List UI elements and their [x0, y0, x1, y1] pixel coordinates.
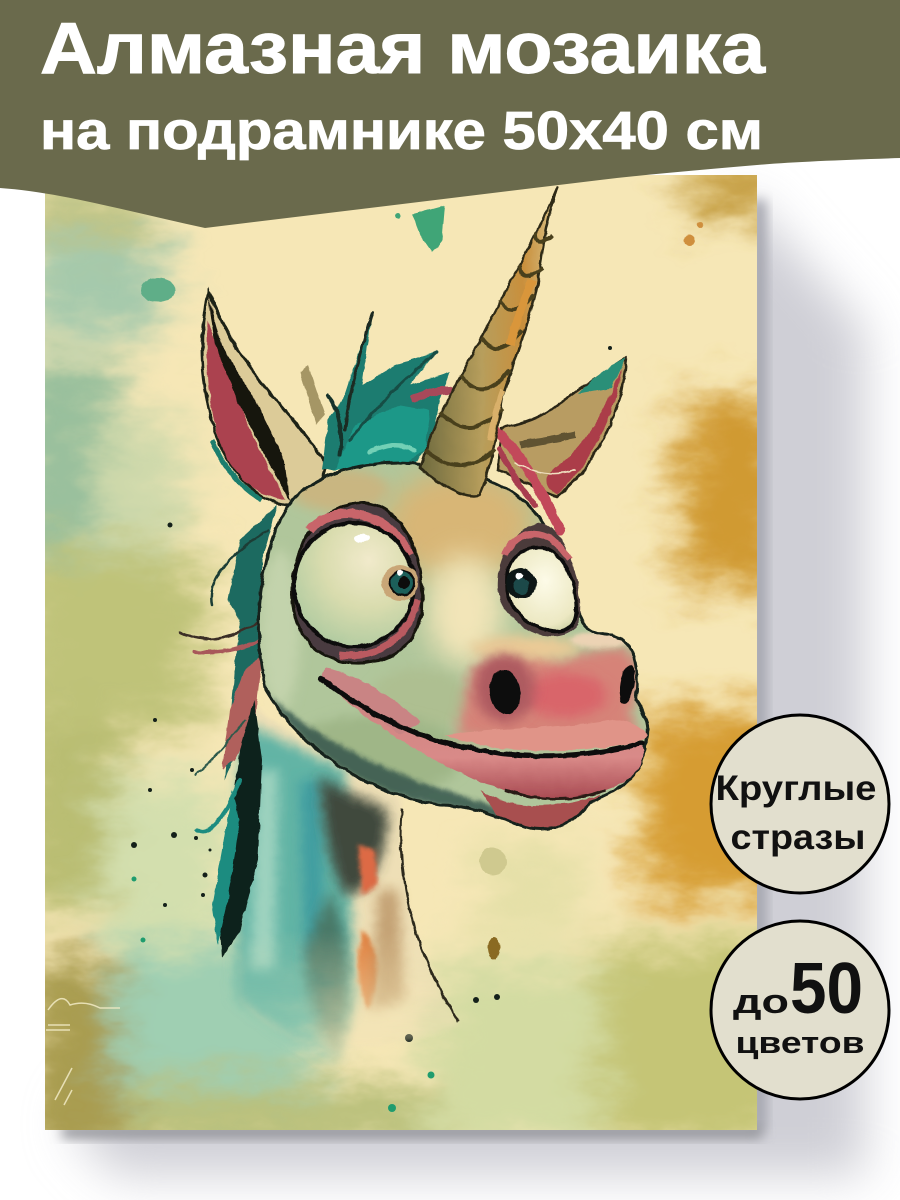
badge: up to 50 colours: до — [733, 983, 789, 1021]
head — [259, 463, 648, 830]
badge: round rhinestones: стразы — [730, 818, 866, 857]
badge: up to 50 colours: цветов — [736, 1025, 864, 1060]
badge: round rhinestones — [711, 715, 889, 893]
snout — [455, 647, 640, 742]
banner — [0, 0, 900, 228]
horn — [420, 186, 558, 496]
title: Алмазная мозаика — [40, 9, 766, 89]
unicorn — [180, 186, 648, 1070]
paint spots — [141, 205, 703, 959]
lips — [320, 668, 648, 799]
badge: up to 50 colours — [711, 921, 889, 1099]
neck — [235, 700, 460, 1070]
signature — [46, 999, 120, 1105]
canvas drop shadow — [62, 195, 865, 1175]
nostrils — [489, 664, 635, 714]
right eye — [498, 524, 580, 636]
ink splatter — [131, 346, 612, 1112]
back mane — [180, 505, 278, 958]
painted background patches — [45, 175, 757, 1130]
badge: round rhinestones: Круглые — [716, 769, 876, 808]
badge: up to 50 colours: 50 — [790, 949, 863, 1029]
canvas painting — [45, 175, 757, 1130]
chin — [480, 790, 600, 828]
right ear — [498, 358, 626, 497]
subtitle: на подрамнике 50х40 см — [40, 101, 763, 161]
top mane — [300, 312, 575, 530]
left ear — [202, 292, 326, 505]
neck outline — [401, 808, 458, 1022]
left eye — [292, 503, 422, 663]
